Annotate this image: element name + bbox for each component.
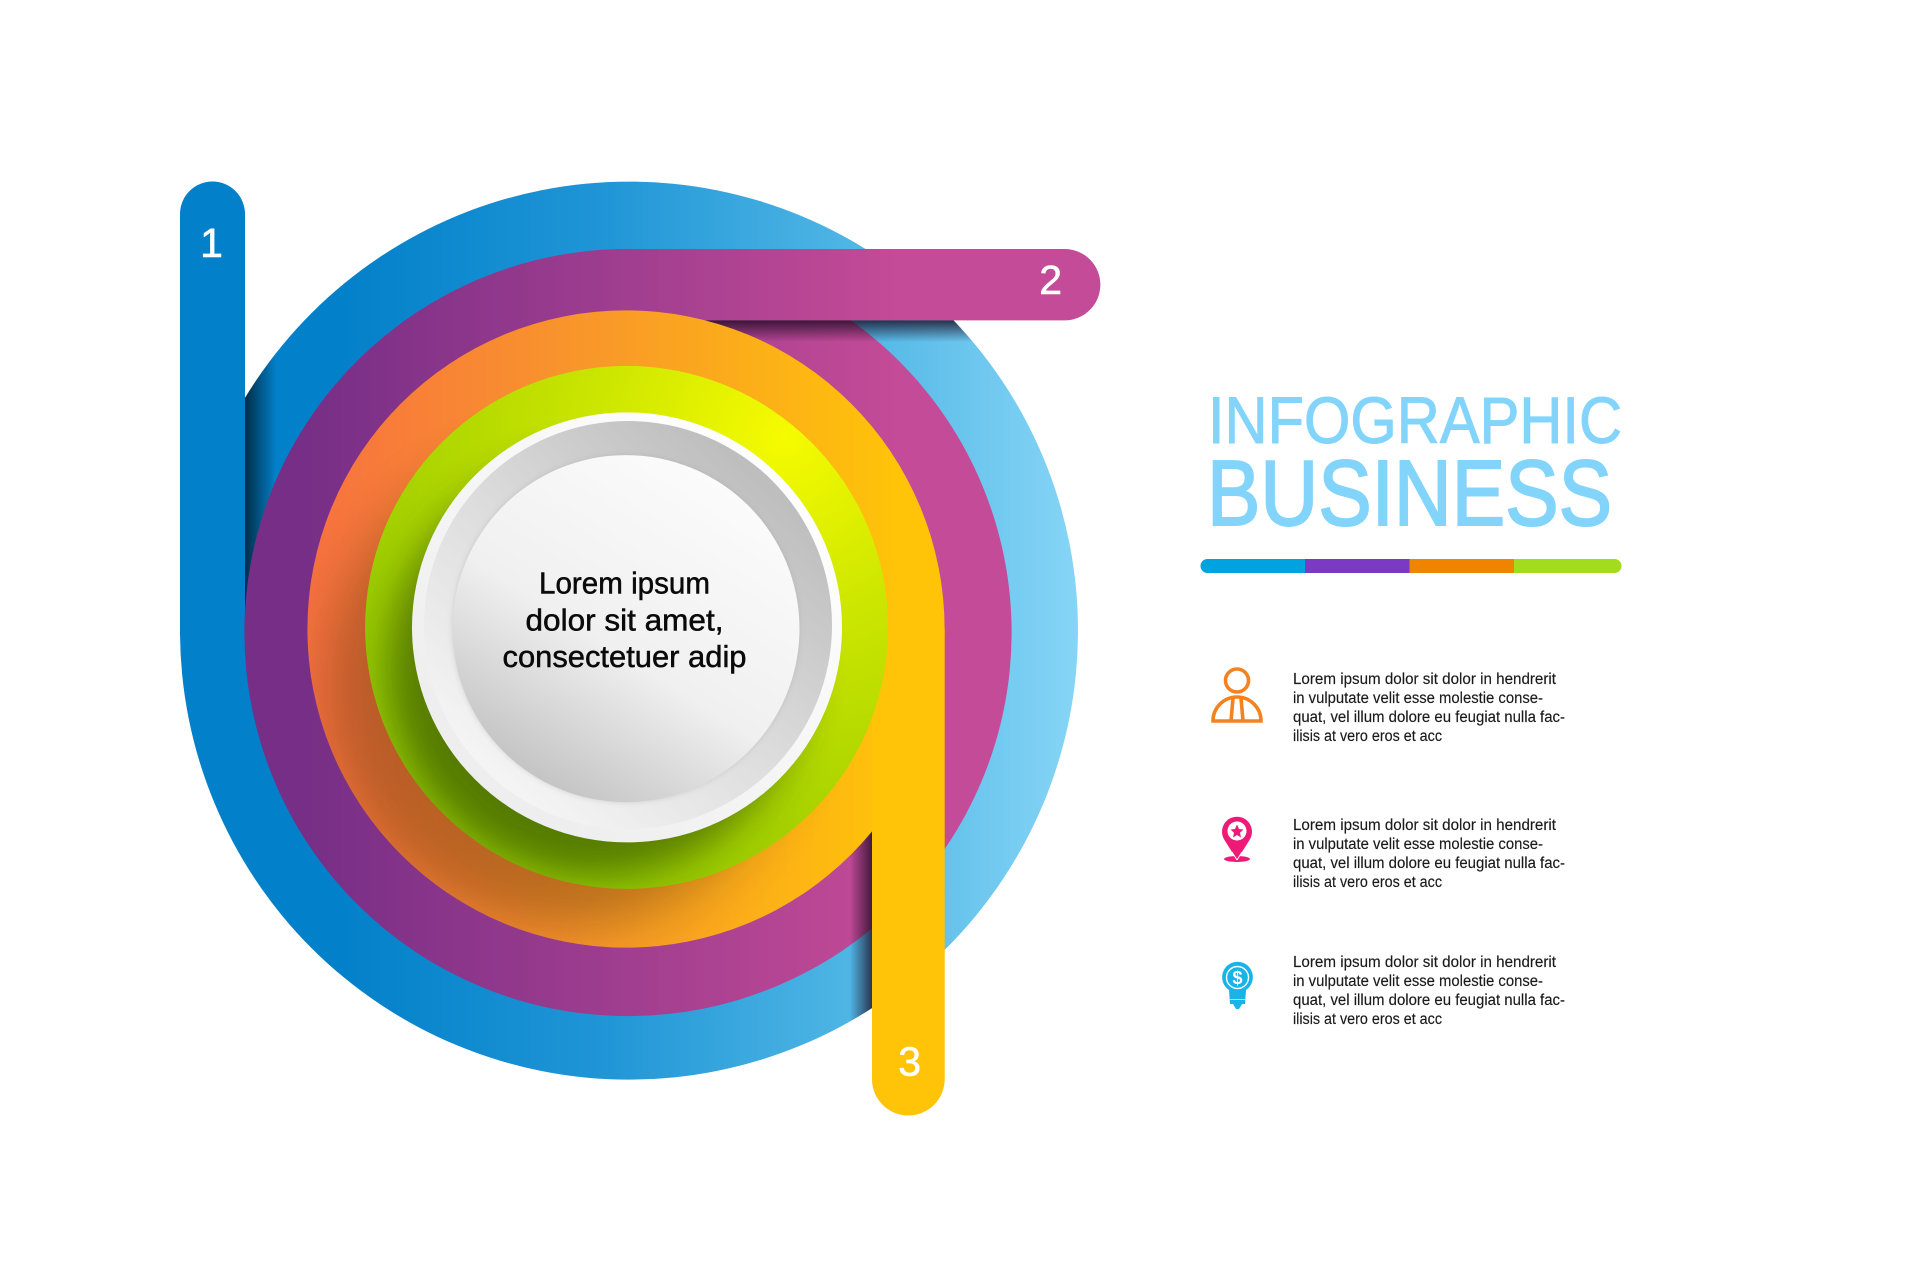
text block 1: Lorem ipsum dolor sit dolor in hendrerit [1293,671,1557,688]
icon: location pin [1222,817,1252,862]
text block 2: quat, vel illum dolore eu feugiat nulla fac- [1293,855,1565,872]
ring 4: green circle [365,366,888,889]
text block 2: in vulputate velit esse molestie conse- [1293,836,1543,853]
tab 3 shadow [851,832,872,1020]
icon: dollar light bulb: $ [1232,968,1243,988]
number 2: 2 [1039,257,1062,303]
text block 2: Lorem ipsum dolor sit dolor in hendrerit [1293,817,1557,834]
text block 3 [1293,954,1565,1028]
center text [502,566,746,674]
tab 2 shadow [704,320,972,341]
icon: dollar light bulb [1222,962,1253,1009]
center text: dolor sit amet, [526,602,724,638]
ring 1: blue circle with tab [180,182,1078,1080]
title: BUSINESS [1207,441,1612,545]
ring 3: orange circle with tab [307,310,945,1116]
text block 1 [1293,671,1565,745]
number 3: 3 [898,1038,921,1084]
center text: Lorem ipsum [539,566,710,600]
title [1207,383,1622,545]
number 1: 1 [200,220,223,266]
text block 3: quat, vel illum dolore eu feugiat nulla fac- [1293,992,1565,1009]
tab 1 shadow [245,356,274,611]
diagram: concentric rings [180,182,1100,1116]
center button [412,412,842,842]
title: INFOGRAPHIC [1208,383,1622,457]
orange shadow [327,450,803,926]
text block 2 [1293,817,1565,891]
icon: person [1213,669,1261,721]
text block 1: in vulputate velit esse molestie conse- [1293,690,1543,707]
text block 1: quat, vel illum dolore eu feugiat nulla fac- [1293,709,1565,726]
green shadow [388,460,804,876]
ring 2: purple circle with tab [244,249,1100,1016]
text block 3: in vulputate velit esse molestie conse- [1293,973,1543,990]
text block 1: ilisis at vero eros et acc [1293,728,1442,745]
colour bar [1201,559,1622,573]
text block 3: ilisis at vero eros et acc [1293,1011,1442,1028]
center text: consectetuer adip [502,639,746,674]
text block 2: ilisis at vero eros et acc [1293,874,1442,891]
text block 3: Lorem ipsum dolor sit dolor in hendrerit [1293,954,1557,971]
